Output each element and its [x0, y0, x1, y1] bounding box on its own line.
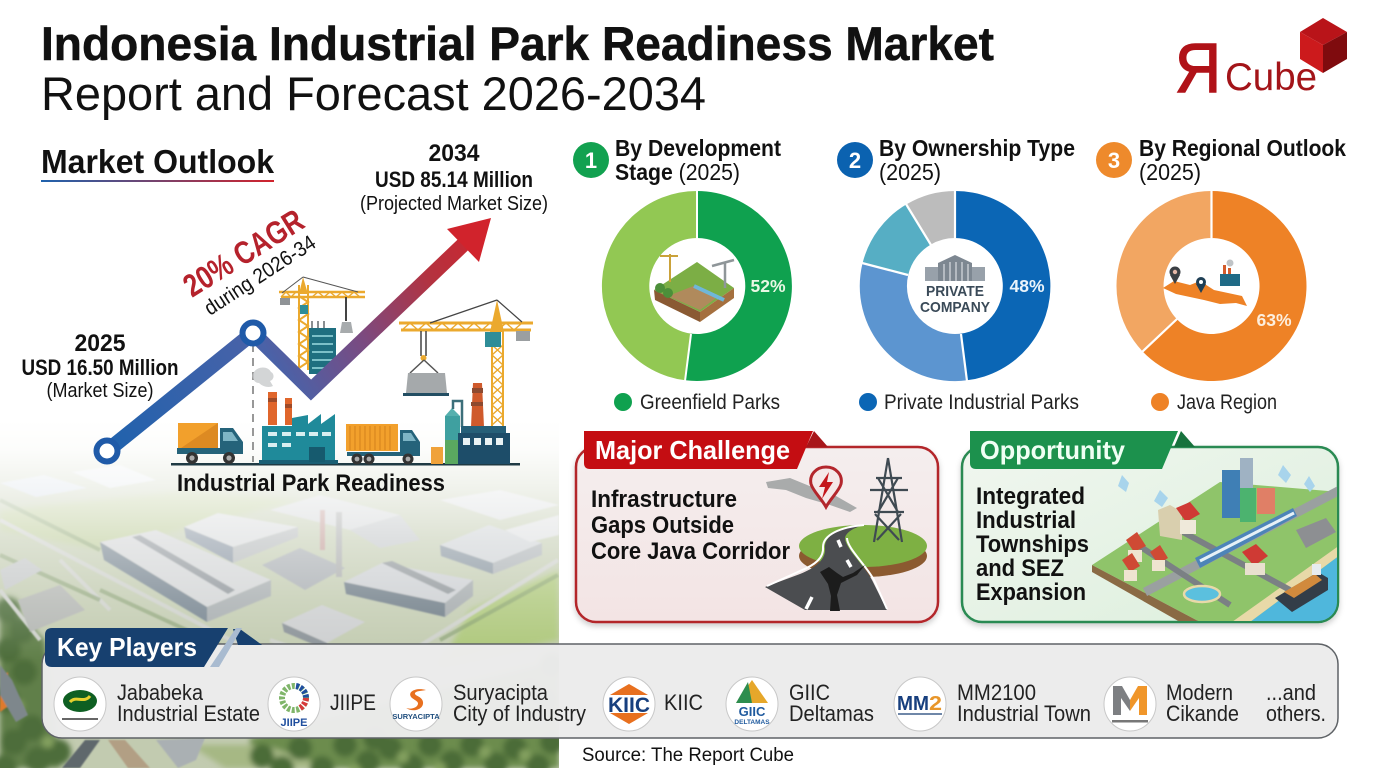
text: challenge description: Gaps Outside	[591, 512, 734, 539]
text: opportunity description: and SEZ	[976, 555, 1064, 582]
panel: by regional outlook: By Regional Outlook	[1139, 135, 1346, 161]
label: 2034 projected size	[360, 140, 548, 215]
panel: by regional outlook: 3	[1108, 148, 1120, 173]
factory	[259, 392, 338, 464]
label: 2025 market size: USD 16.50 Million	[22, 355, 178, 380]
label: 2034 projected size: (Projected Market Size)	[360, 193, 548, 215]
title	[41, 17, 994, 120]
player: MM2100	[894, 677, 1091, 731]
icon: broken road, pylon and map pin	[765, 458, 927, 611]
panel: opportunity	[962, 431, 1340, 622]
player: GIIC Deltamas: Deltamas	[789, 701, 874, 726]
label: CAGR: during 2026-34	[200, 231, 320, 320]
panel: major challenge	[576, 431, 938, 622]
logo: RCube: Cube	[1225, 56, 1317, 99]
text: opportunity description: Integrated	[976, 483, 1085, 510]
label: 2034 projected size: 2034	[428, 140, 480, 167]
illustration: cranes and city	[279, 277, 533, 427]
source line: Source: The Report Cube	[582, 745, 794, 766]
player: GIIC Deltamas: DELTAMAS	[734, 719, 770, 726]
player: GIIC Deltamas: GIIC	[789, 680, 830, 705]
icon: Java map with pins	[1163, 260, 1247, 306]
truck: container	[346, 424, 420, 464]
player: Jababeka: Industrial Estate	[117, 701, 260, 726]
title: Report and Forecast 2026-2034	[41, 67, 706, 120]
player: Modern Cikande: Cikande	[1166, 701, 1239, 726]
icon: private company building: PRIVATE	[926, 283, 984, 300]
player: Suryacipta: City of Industry	[453, 701, 586, 726]
header: opportunity: Opportunity	[980, 435, 1126, 465]
player: KIIC: KIIC	[608, 694, 650, 717]
player: MM2100: MM2100	[957, 680, 1036, 705]
player: Modern Cikande	[1104, 677, 1239, 731]
donut chart: ownership type	[860, 190, 1050, 381]
icon: isometric township	[1092, 458, 1340, 622]
illustration: trucks and factories	[171, 368, 520, 466]
player: Suryacipta: SURYACIPTA	[392, 712, 440, 721]
text: and others	[1266, 680, 1326, 726]
text: opportunity description	[976, 483, 1089, 606]
panel: key players	[42, 628, 1338, 738]
panel: by development stage: Stage (2025)	[615, 159, 740, 185]
background: aerial photo of industrial park	[0, 461, 559, 768]
header: major challenge	[584, 431, 813, 469]
donut chart: development stage: 52%	[750, 276, 786, 296]
header: key players: Key Players	[57, 632, 197, 662]
panel: by development stage: By Development	[615, 135, 781, 161]
donut chart: ownership type: 48%	[1009, 276, 1045, 296]
caption: Industrial Park Readiness: Industrial Park Readiness	[177, 470, 445, 497]
player: Modern Cikande: Modern	[1166, 680, 1233, 705]
legend: greenfield parks: Greenfield Parks	[640, 391, 780, 414]
label: CAGR	[177, 202, 320, 320]
player: MM2100: Industrial Town	[957, 701, 1091, 726]
text: opportunity description: Expansion	[976, 579, 1086, 606]
player: JIIPE: JIIPE	[281, 717, 307, 729]
donut chart: regional outlook: 63%	[1256, 310, 1292, 330]
logo: RCube	[1175, 18, 1347, 107]
header: key players	[45, 628, 242, 667]
header: major challenge: Major Challenge	[595, 435, 790, 465]
donut chart: regional outlook	[1116, 190, 1306, 381]
donut chart: development stage	[602, 190, 792, 381]
text: and others: ...and	[1266, 680, 1316, 705]
panel: by ownership type	[837, 135, 1079, 414]
text: challenge description: Infrastructure	[591, 486, 737, 513]
player: Suryacipta	[390, 677, 586, 731]
panel: by ownership type: 2	[849, 148, 861, 173]
player: JIIPE	[268, 677, 376, 731]
panel: by regional outlook	[1096, 135, 1346, 414]
player: Jababeka: Jababeka	[117, 680, 204, 705]
panel: by ownership type: (2025)	[879, 159, 941, 185]
text: and others: others.	[1266, 701, 1326, 726]
icon: private company building	[920, 255, 990, 316]
player: Jababeka	[54, 677, 260, 731]
player: MM2100: MM	[897, 693, 929, 715]
heading: Market Outlook: Market Outlook	[41, 143, 275, 180]
logo: RCube: Я	[1175, 29, 1221, 107]
label: 2025 market size: (Market Size)	[46, 380, 154, 402]
label: 2025 market size: 2025	[74, 330, 126, 357]
panel: by regional outlook: (2025)	[1139, 159, 1201, 185]
title: Indonesia Industrial Park Readiness Market	[41, 17, 994, 70]
truck: orange box	[177, 423, 243, 464]
text: challenge description	[591, 486, 790, 565]
panel: by development stage: 1	[585, 148, 597, 173]
player: GIIC Deltamas: GIIC	[739, 704, 766, 719]
label: CAGR: 20% CAGR	[177, 202, 310, 304]
growth line with arrow	[96, 218, 491, 462]
icon: private company building: COMPANY	[920, 299, 990, 316]
player: KIIC: KIIC	[664, 690, 703, 715]
player: MM2100: 2	[929, 693, 942, 715]
icon: greenfield land	[654, 254, 734, 322]
player: KIIC	[603, 677, 703, 731]
text: opportunity description: Industrial	[976, 507, 1076, 534]
text: challenge description: Core Java Corridor	[591, 538, 790, 565]
label: 2034 projected size: USD 85.14 Million	[375, 167, 533, 192]
refinery block	[431, 383, 510, 464]
player: Suryacipta: Suryacipta	[453, 680, 549, 705]
panel: by development stage	[573, 135, 792, 414]
player: GIIC Deltamas	[726, 677, 874, 731]
legend: java region: Java Region	[1177, 391, 1277, 414]
label: 2025 market size	[22, 330, 178, 402]
panel: by ownership type: By Ownership Type	[879, 135, 1075, 161]
header: opportunity	[970, 431, 1178, 469]
legend: private industrial parks: Private Industrial Parks	[884, 391, 1079, 414]
player: JIIPE: JIIPE	[330, 690, 376, 715]
text: opportunity description: Townships	[976, 531, 1089, 558]
